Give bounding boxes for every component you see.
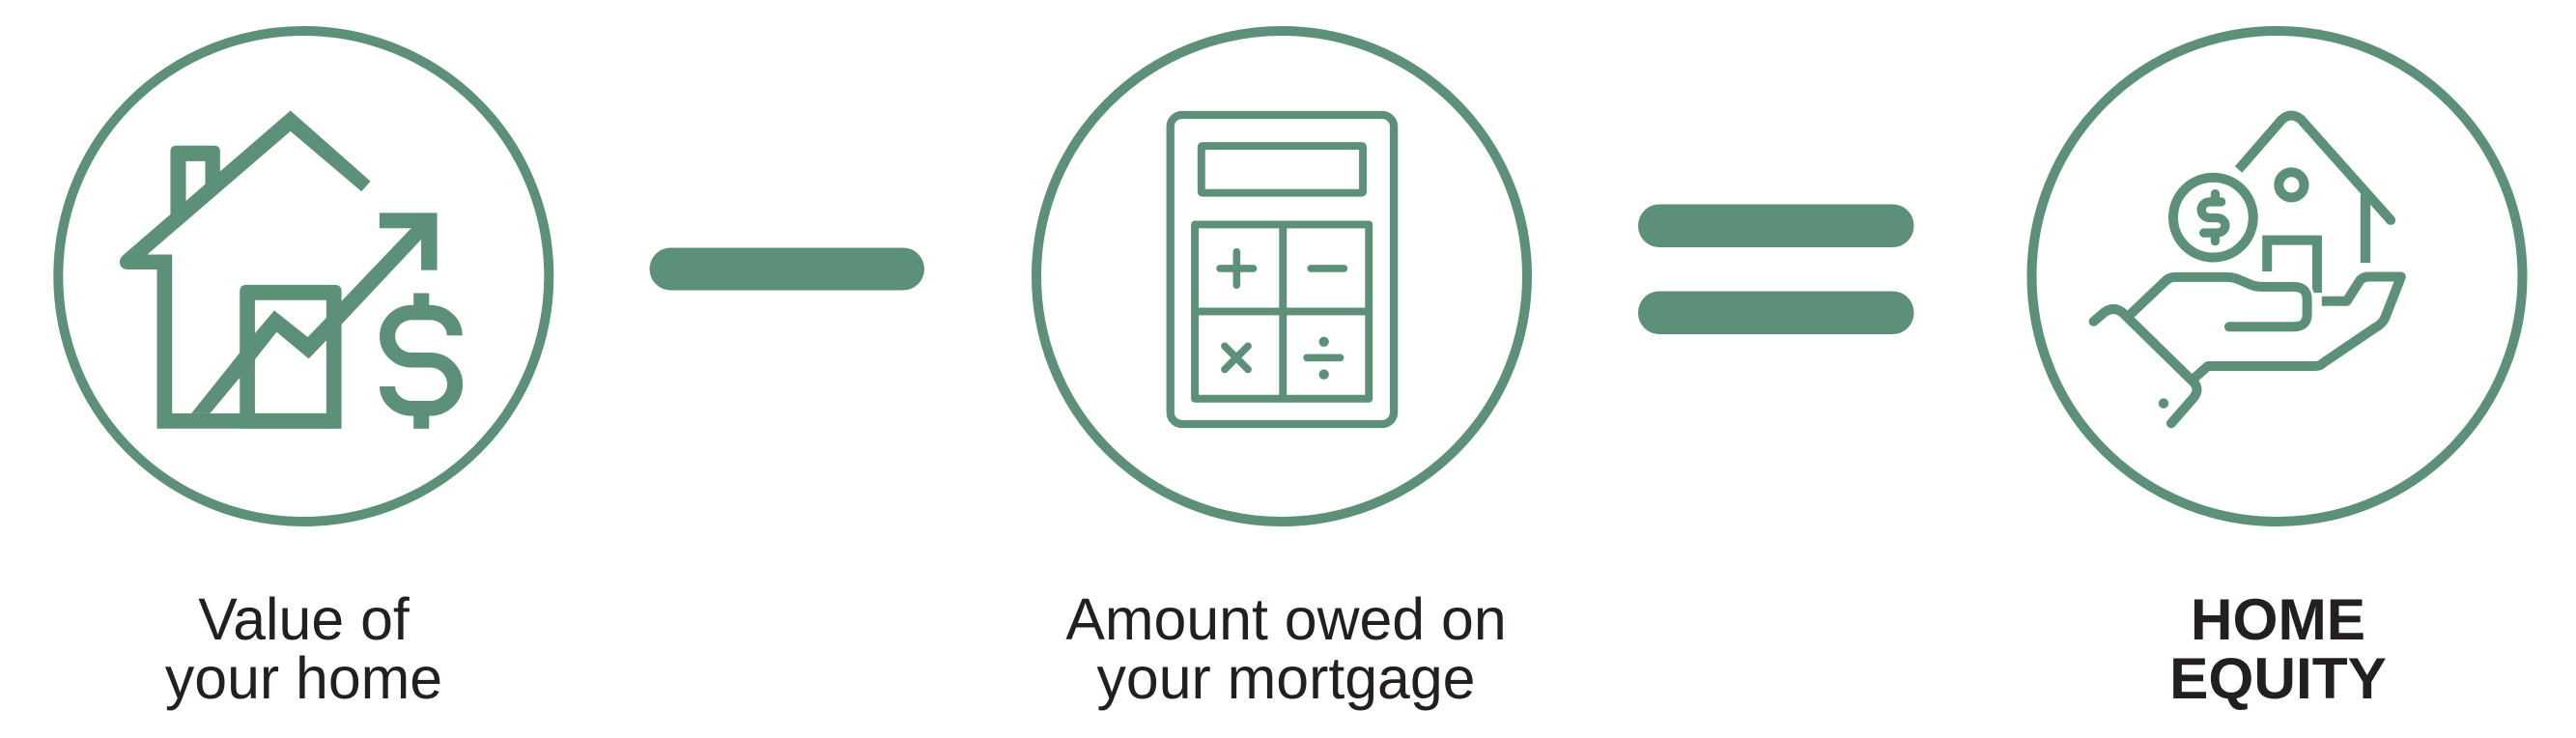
sleeve cuff — [2094, 309, 2196, 423]
divide key — [1307, 337, 1341, 380]
house door — [2267, 241, 2317, 293]
equals sign — [1638, 205, 1914, 334]
label: amount owed on your mortgage: Amount owed on — [1065, 586, 1507, 652]
label: home equity: HOME — [2191, 586, 2365, 652]
coin dollar sign — [2201, 194, 2225, 241]
house roof — [2239, 115, 2391, 220]
label: value of your home: your home — [165, 645, 442, 711]
minus key — [1311, 258, 1344, 279]
icon: house with rising arrow and dollar sign — [120, 110, 455, 429]
chimney — [170, 146, 220, 219]
cuff button — [2159, 398, 2168, 409]
icon: hand holding house and coin — [2094, 115, 2401, 423]
dollar sign — [387, 293, 455, 429]
label: value of your home: Value of — [198, 586, 410, 652]
multiply key — [1225, 346, 1248, 369]
thumb and palm outline — [2194, 277, 2401, 379]
panel: value of your home — [58, 31, 549, 711]
label: home equity: EQUITY — [2169, 645, 2387, 711]
finger gap — [2293, 287, 2307, 309]
circle outline — [58, 31, 549, 522]
display — [1202, 146, 1363, 193]
house wall — [2351, 194, 2380, 263]
house outline — [120, 110, 371, 429]
plus key — [1220, 252, 1254, 285]
circle outline — [1036, 31, 1527, 522]
hand fingers — [2131, 277, 2307, 326]
icon: calculator — [1171, 115, 1394, 424]
coin — [2173, 178, 2253, 258]
roof end cap — [2386, 215, 2395, 225]
circle outline — [2032, 31, 2523, 522]
panel: amount owed on your mortgage — [1036, 31, 1527, 711]
arrow — [191, 213, 437, 413]
label: amount owed on your mortgage: your mortgage — [1096, 645, 1476, 711]
keypad grid — [1195, 224, 1369, 399]
house window — [2279, 172, 2305, 197]
window — [240, 285, 342, 429]
panel: home equity — [2032, 31, 2523, 711]
calculator body — [1171, 115, 1394, 424]
minus sign — [649, 247, 924, 290]
